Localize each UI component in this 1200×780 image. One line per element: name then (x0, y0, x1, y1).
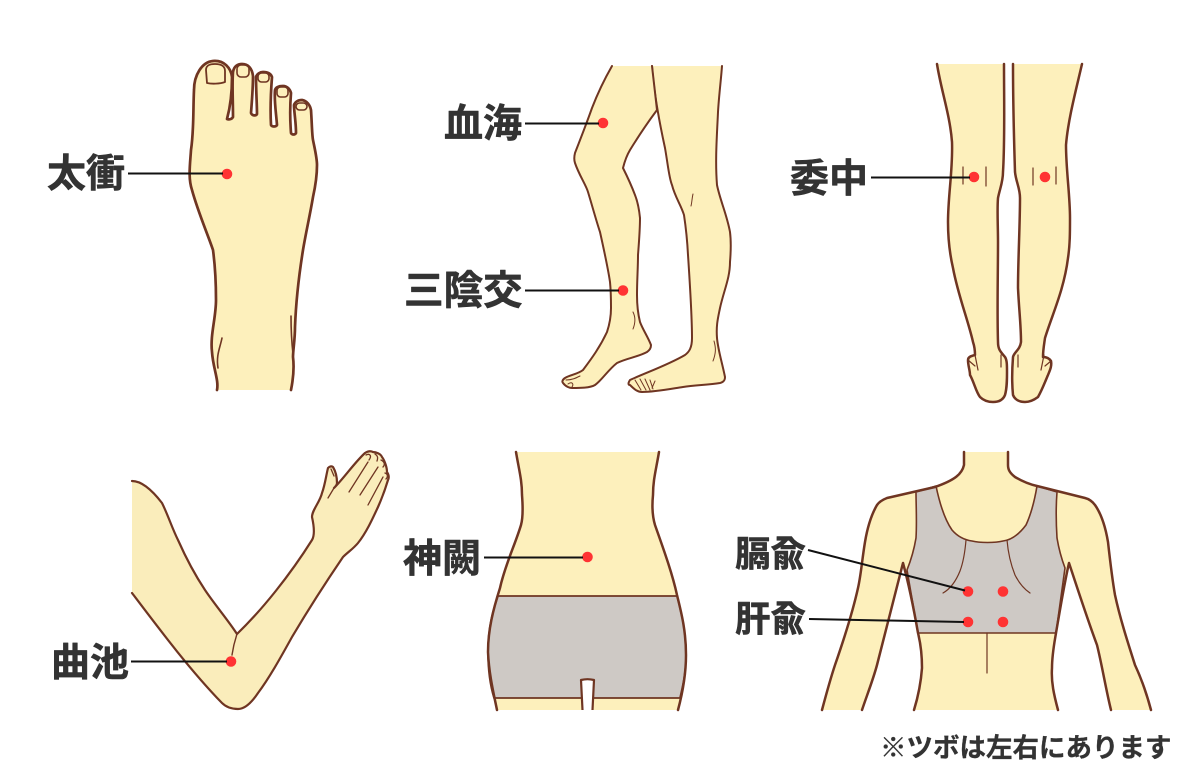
arm details (232, 454, 387, 655)
right back leg (1012, 64, 1082, 402)
acupoint 太衝 (222, 169, 232, 179)
waist skin fill (488, 452, 686, 710)
label: 肝兪 (735, 599, 964, 639)
torso skin fill (822, 452, 1151, 710)
creases and nails (206, 64, 307, 368)
label: 三陰交: 三陰交 (404, 269, 523, 313)
leg details (566, 194, 715, 390)
acupoint 神闕 (582, 552, 593, 562)
label: 肝兪: 肝兪 (735, 599, 806, 639)
footnote: ※ツボは左右にあります (880, 733, 1172, 763)
label: 血海: 血海 (444, 103, 522, 146)
foot outline (190, 61, 317, 390)
panel: back of legs with 委中 (937, 64, 1082, 402)
panel: arm with 曲池 (132, 451, 389, 709)
panel: waist with 神闕 (488, 452, 686, 710)
far leg (628, 66, 731, 392)
arm outline (132, 451, 389, 709)
label: 委中: 委中 (790, 158, 868, 201)
label: 膈兪: 膈兪 (735, 534, 806, 574)
knee and ankle creases (963, 167, 1056, 370)
near leg (562, 66, 657, 388)
acupoint 血海 (598, 118, 608, 128)
panel: back torso with 膈兪 and 肝兪 (822, 452, 1151, 710)
acupoint 曲池 (226, 656, 236, 667)
torso outlines (822, 452, 1151, 710)
waist side outlines (488, 452, 686, 710)
label: 神闕: 神闕 (403, 538, 481, 581)
leg gap (581, 679, 594, 710)
acupoint 委中 left (969, 172, 979, 182)
seams (943, 540, 1030, 673)
label: 膈兪 (735, 534, 965, 590)
acupoint 三陰交 (618, 285, 628, 296)
panel: side legs with 血海 and 三陰交 (562, 66, 731, 392)
panel: foot with 太衝 (190, 61, 317, 390)
label: 太衝: 太衝 (47, 153, 125, 196)
gray shorts (488, 596, 686, 698)
acupoint 委中 right (1040, 172, 1050, 182)
gray top (907, 486, 1065, 633)
left back leg (937, 64, 1007, 402)
acupoints (963, 586, 1008, 627)
label: 曲池: 曲池 (51, 642, 129, 685)
